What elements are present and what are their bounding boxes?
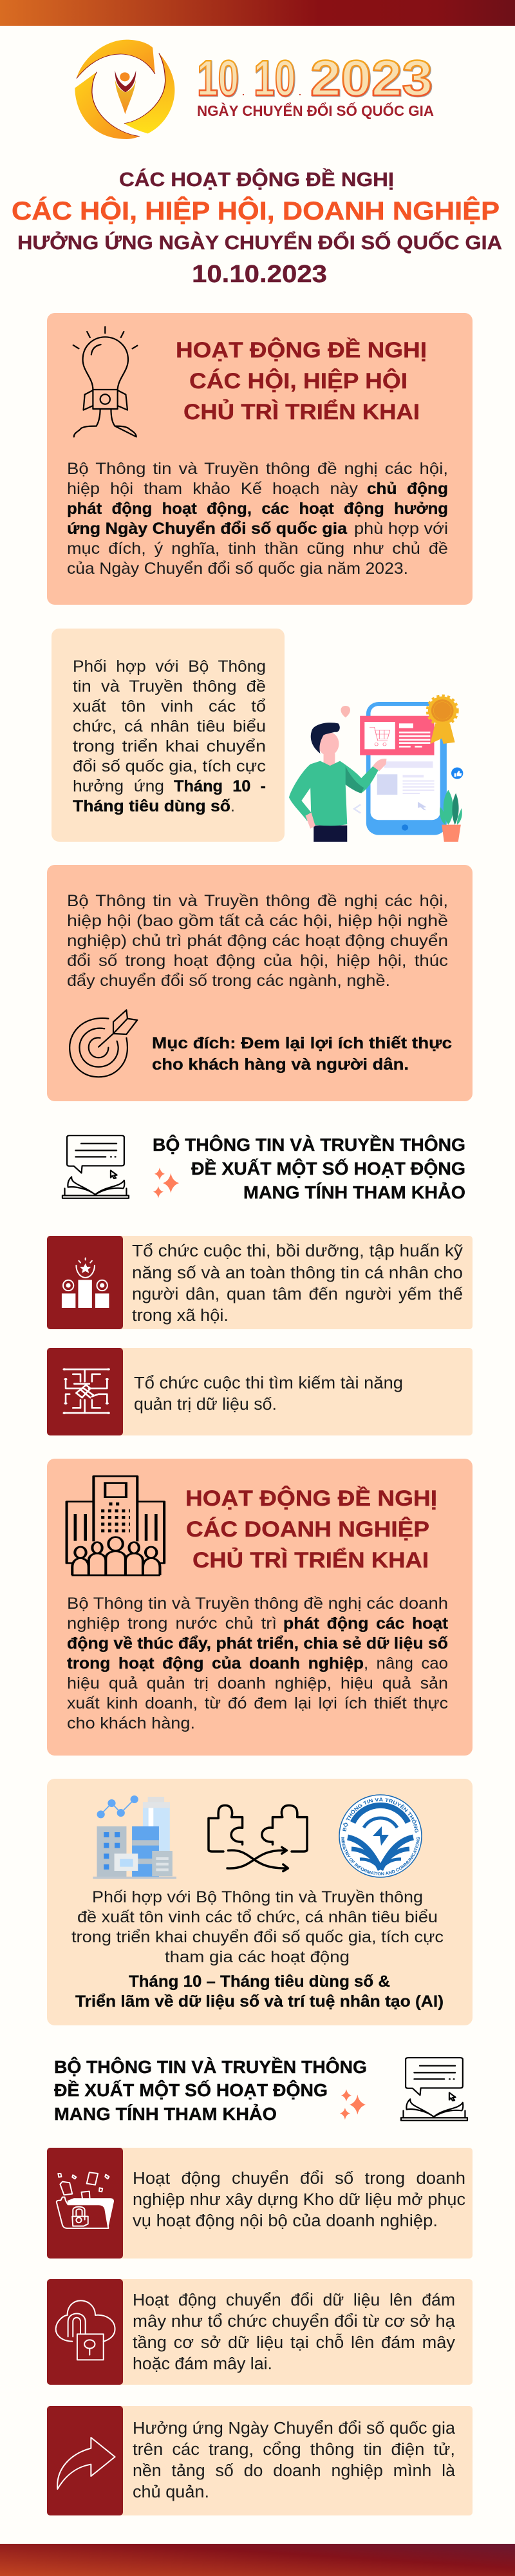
body text — [67, 460, 448, 578]
body text: phát động hoạt động, các hoạt động hưởng — [67, 500, 448, 518]
body text: đẩy chuyển đổi số trong các ngành, nghề. — [67, 972, 390, 990]
heading text: BỘ THÔNG TIN VÀ TRUYỀN THÔNG — [153, 1134, 465, 1155]
icon: puzzle pieces with crossing arrows — [209, 1805, 307, 1871]
body text: đề xuất tôn vinh các tổ chức, cá nhân tiêu biểu — [77, 1908, 438, 1926]
map pin — [341, 706, 350, 717]
body text: Triển lãm về dữ liệu số và trí tuệ nhân tạo (AI) — [75, 1993, 444, 2011]
icon: share arrow — [57, 2438, 115, 2489]
heading: CÁC DOANH NGHIỆP — [186, 1517, 429, 1542]
card text: tầng cơ sở dữ liệu tại chỗ lên đám mây — [133, 2333, 455, 2352]
icon: ministry emblem — [339, 1794, 422, 1878]
body text: của Ngày Chuyển đổi số quốc gia năm 2023. — [67, 560, 408, 578]
phone — [354, 702, 447, 835]
heading text: MANG TÍNH THAM KHẢO — [54, 2103, 277, 2124]
main title — [12, 167, 502, 288]
potted plant — [440, 790, 462, 842]
icon: cloud with lock — [56, 2300, 115, 2360]
body text: , nâng cao — [364, 1654, 448, 1672]
body text: tham gia các hoạt động — [165, 1948, 350, 1966]
illustration: man with shopping phone — [289, 696, 463, 842]
card text: năng số và an toàn thông tin cá nhân cho — [132, 1264, 463, 1282]
heading: CHỦ TRÌ TRIỂN KHAI — [183, 400, 420, 424]
logo title: date: 2023 — [310, 50, 433, 106]
body text: . — [230, 797, 235, 815]
icon: buildings with chart — [93, 1795, 176, 1879]
card text: trong xã hội. — [132, 1307, 229, 1325]
body text — [71, 1888, 444, 2011]
body text: nghiệp trong nước chủ trì — [67, 1615, 277, 1633]
card text: nghiệp như xây dựng Kho dữ liệu mở phục — [133, 2191, 465, 2209]
icon: rocket bulb — [73, 327, 137, 437]
body text: đổi số trong hoạt động của hội, hiệp hội, thúc — [67, 952, 448, 970]
body text: trong hoạt động của doanh nghiệp — [67, 1654, 364, 1672]
heading text — [153, 1134, 465, 1202]
card: cloud migration — [47, 2279, 473, 2385]
card text: Hoạt động chuyển đổi dữ liệu lên đám — [133, 2291, 455, 2309]
icon: swirl logo — [75, 40, 174, 139]
section heading with book icon — [62, 1134, 465, 1202]
icon: chat bubble over open book — [401, 2058, 467, 2121]
card: skills contest — [47, 1236, 473, 1329]
card: data governance talent — [47, 1348, 473, 1435]
purpose callout: Mục đích: Đem lại lợi ích thiết thực — [152, 1034, 452, 1052]
panel: coordinate with ministry — [52, 629, 285, 842]
card text: hoặc đám mây lai. — [133, 2355, 272, 2373]
card text: trên các trang, cổng thông tin điện tử, — [133, 2441, 455, 2459]
icon: sparkles — [340, 2089, 366, 2120]
heading: HOẠT ĐỘNG ĐỀ NGHỊ — [176, 337, 427, 363]
main title: CÁC HỘI, HIỆP HỘI, DOANH NGHIỆP — [12, 196, 500, 225]
icon: ministry emblem: MINISTRY OF INFORMATION AND COMMUNICATIONS — [341, 1837, 420, 1875]
body text: Tháng tiêu dùng số — [73, 797, 230, 815]
heading text: ĐỀ XUẤT MỘT SỐ HOẠT ĐỘNG — [54, 2079, 328, 2100]
heading text — [54, 2056, 367, 2124]
icon: target with arrow — [70, 1010, 137, 1077]
heading — [176, 337, 427, 424]
body text: ứng Ngày Chuyển đổi số quốc gia — [67, 520, 348, 538]
card text: Tổ chức cuộc thi tìm kiếm tài năng — [134, 1374, 403, 1392]
logo title: date: 10 — [254, 50, 295, 106]
heading — [185, 1486, 437, 1573]
like badge — [451, 768, 463, 779]
body text: Tháng 10 - — [174, 777, 266, 795]
icon: podium with star medals — [62, 1258, 109, 1308]
card: open data warehouse — [47, 2148, 473, 2259]
body text: hiệu quả quản trị doanh nghiệp, hiệu quả sản — [67, 1674, 448, 1692]
heading: HOẠT ĐỘNG ĐỀ NGHỊ — [185, 1486, 437, 1511]
card text: Tổ chức cuộc thi, bồi dưỡng, tập huấn kỹ — [132, 1242, 463, 1260]
logo title: date: . — [242, 87, 245, 97]
body text: hiệp hội (bao gồm tất cả các hội, hiệp hội nghề — [67, 912, 448, 930]
body text: phù hợp với — [354, 520, 448, 538]
icon: circuit handshake — [62, 1368, 110, 1414]
panel: enterprises lead activities — [47, 1459, 473, 1756]
body text: chủ động — [367, 480, 448, 498]
heading: CHỦ TRÌ TRIỂN KHAI — [192, 1548, 429, 1573]
icon: open folder with papers — [57, 2172, 114, 2228]
panel: enterprise honours — [47, 1779, 473, 2025]
heading: CÁC HỘI, HIỆP HỘI — [189, 368, 407, 393]
body text: Phối hợp với Bộ Thông tin và Truyền thông — [92, 1888, 423, 1906]
panel: associations digital transformation — [47, 865, 473, 1101]
award ribbon — [428, 696, 457, 744]
card text: chủ quản. — [133, 2483, 209, 2501]
logo title: date: . — [299, 87, 301, 97]
icon: sparkles — [153, 1168, 179, 1198]
body text: Bộ Thông tin và Truyền thông đề nghị các hội, — [67, 460, 448, 478]
body text: mục đích, ý nghĩa, tinh thần cũng như chủ đề — [67, 540, 448, 558]
body text: nghiệp) chủ trì phát động các hoạt động chuyển — [67, 932, 448, 950]
body text: hưởng ứng — [73, 777, 164, 795]
body text: cho khách hàng. — [67, 1714, 195, 1732]
body text — [67, 892, 448, 990]
product card — [360, 716, 434, 755]
card text — [134, 1374, 403, 1414]
body text: xuất tôn vinh các tổ — [73, 697, 266, 715]
logo title: date: 10 — [197, 50, 239, 106]
panel: associations lead activities — [47, 313, 473, 605]
body text: Bộ Thông tin và Truyền thông đề nghị các hội, — [67, 892, 448, 910]
body text: động về thúc đẩy, phát triển, chia sẻ dữ liệu số — [67, 1634, 448, 1653]
body text: phát động các hoạt — [283, 1615, 449, 1633]
card text: nền tảng số do doanh nghiệp mình là — [133, 2462, 456, 2480]
card text — [133, 2420, 456, 2501]
icon: office buildings and people — [67, 1476, 164, 1575]
card text: Hưởng ứng Ngày Chuyển đổi số quốc gia — [133, 2420, 456, 2438]
body text — [67, 1595, 449, 1732]
top gradient bar — [0, 0, 515, 26]
body text: Tháng 10 – Tháng tiêu dùng số & — [129, 1973, 390, 1991]
bottom gradient bar — [0, 2544, 515, 2576]
card text — [133, 2170, 465, 2230]
logo title: date — [197, 50, 433, 106]
body text: xuất kinh doanh, từ đó đem lại lợi ích thiết thực — [67, 1694, 448, 1712]
heading text: BỘ THÔNG TIN VÀ TRUYỀN THÔNG — [54, 2056, 367, 2077]
body text — [73, 658, 266, 815]
logo subtitle: NGÀY CHUYỂN ĐỔI SỐ QUỐC GIA — [197, 102, 434, 119]
card text: người dân, quan tâm đến người yếm thế — [132, 1285, 463, 1303]
body text: trong triển khai chuyển đổi số quốc gia, tích cực — [71, 1928, 444, 1946]
icon: chat bubble over open book — [62, 1135, 129, 1198]
card text: Hoạt động chuyển đổi số trong doanh — [133, 2170, 465, 2188]
card text — [133, 2291, 456, 2373]
person — [289, 723, 387, 842]
main title: HƯỞNG ỨNG NGÀY CHUYỂN ĐỔI SỐ QUỐC GIA — [17, 231, 502, 254]
icon: ministry emblem: BỘ THÔNG TIN VÀ TRUYỀN THÔNG — [342, 1797, 418, 1833]
section heading with book icon, second — [54, 2056, 467, 2124]
card text — [132, 1242, 463, 1325]
body text: hiệp hội tham khảo Kế hoạch này — [67, 480, 359, 498]
purpose callout: cho khách hàng và người dân. — [152, 1056, 409, 1074]
card text: quản trị dữ liệu số. — [134, 1396, 277, 1414]
main title: CÁC HOẠT ĐỘNG ĐỀ NGHỊ — [119, 167, 394, 191]
body text: đổi số quốc gia, tích cực — [73, 757, 266, 775]
body text: Phối hợp với Bộ Thông — [73, 658, 266, 676]
body text: Bộ Thông tin và Truyền thông đề nghị các doanh — [67, 1595, 448, 1613]
purpose callout — [152, 1034, 452, 1074]
body text: tin và Truyền thông đề — [73, 677, 266, 696]
body text: trong triển khai chuyển — [73, 737, 266, 755]
card: respond on portals — [47, 2406, 473, 2515]
body text: chức, cá nhân tiêu biểu — [73, 717, 266, 735]
heading text: ĐỀ XUẤT MỘT SỐ HOẠT ĐỘNG — [191, 1158, 465, 1179]
card text: vụ hoạt động nội bộ của doanh nghiệp. — [133, 2212, 438, 2230]
card text: mây như tổ chức chuyển đổi từ cơ sở hạ — [133, 2313, 456, 2331]
heading text: MANG TÍNH THAM KHẢO — [243, 1182, 465, 1202]
main title: 10.10.2023 — [192, 261, 327, 288]
